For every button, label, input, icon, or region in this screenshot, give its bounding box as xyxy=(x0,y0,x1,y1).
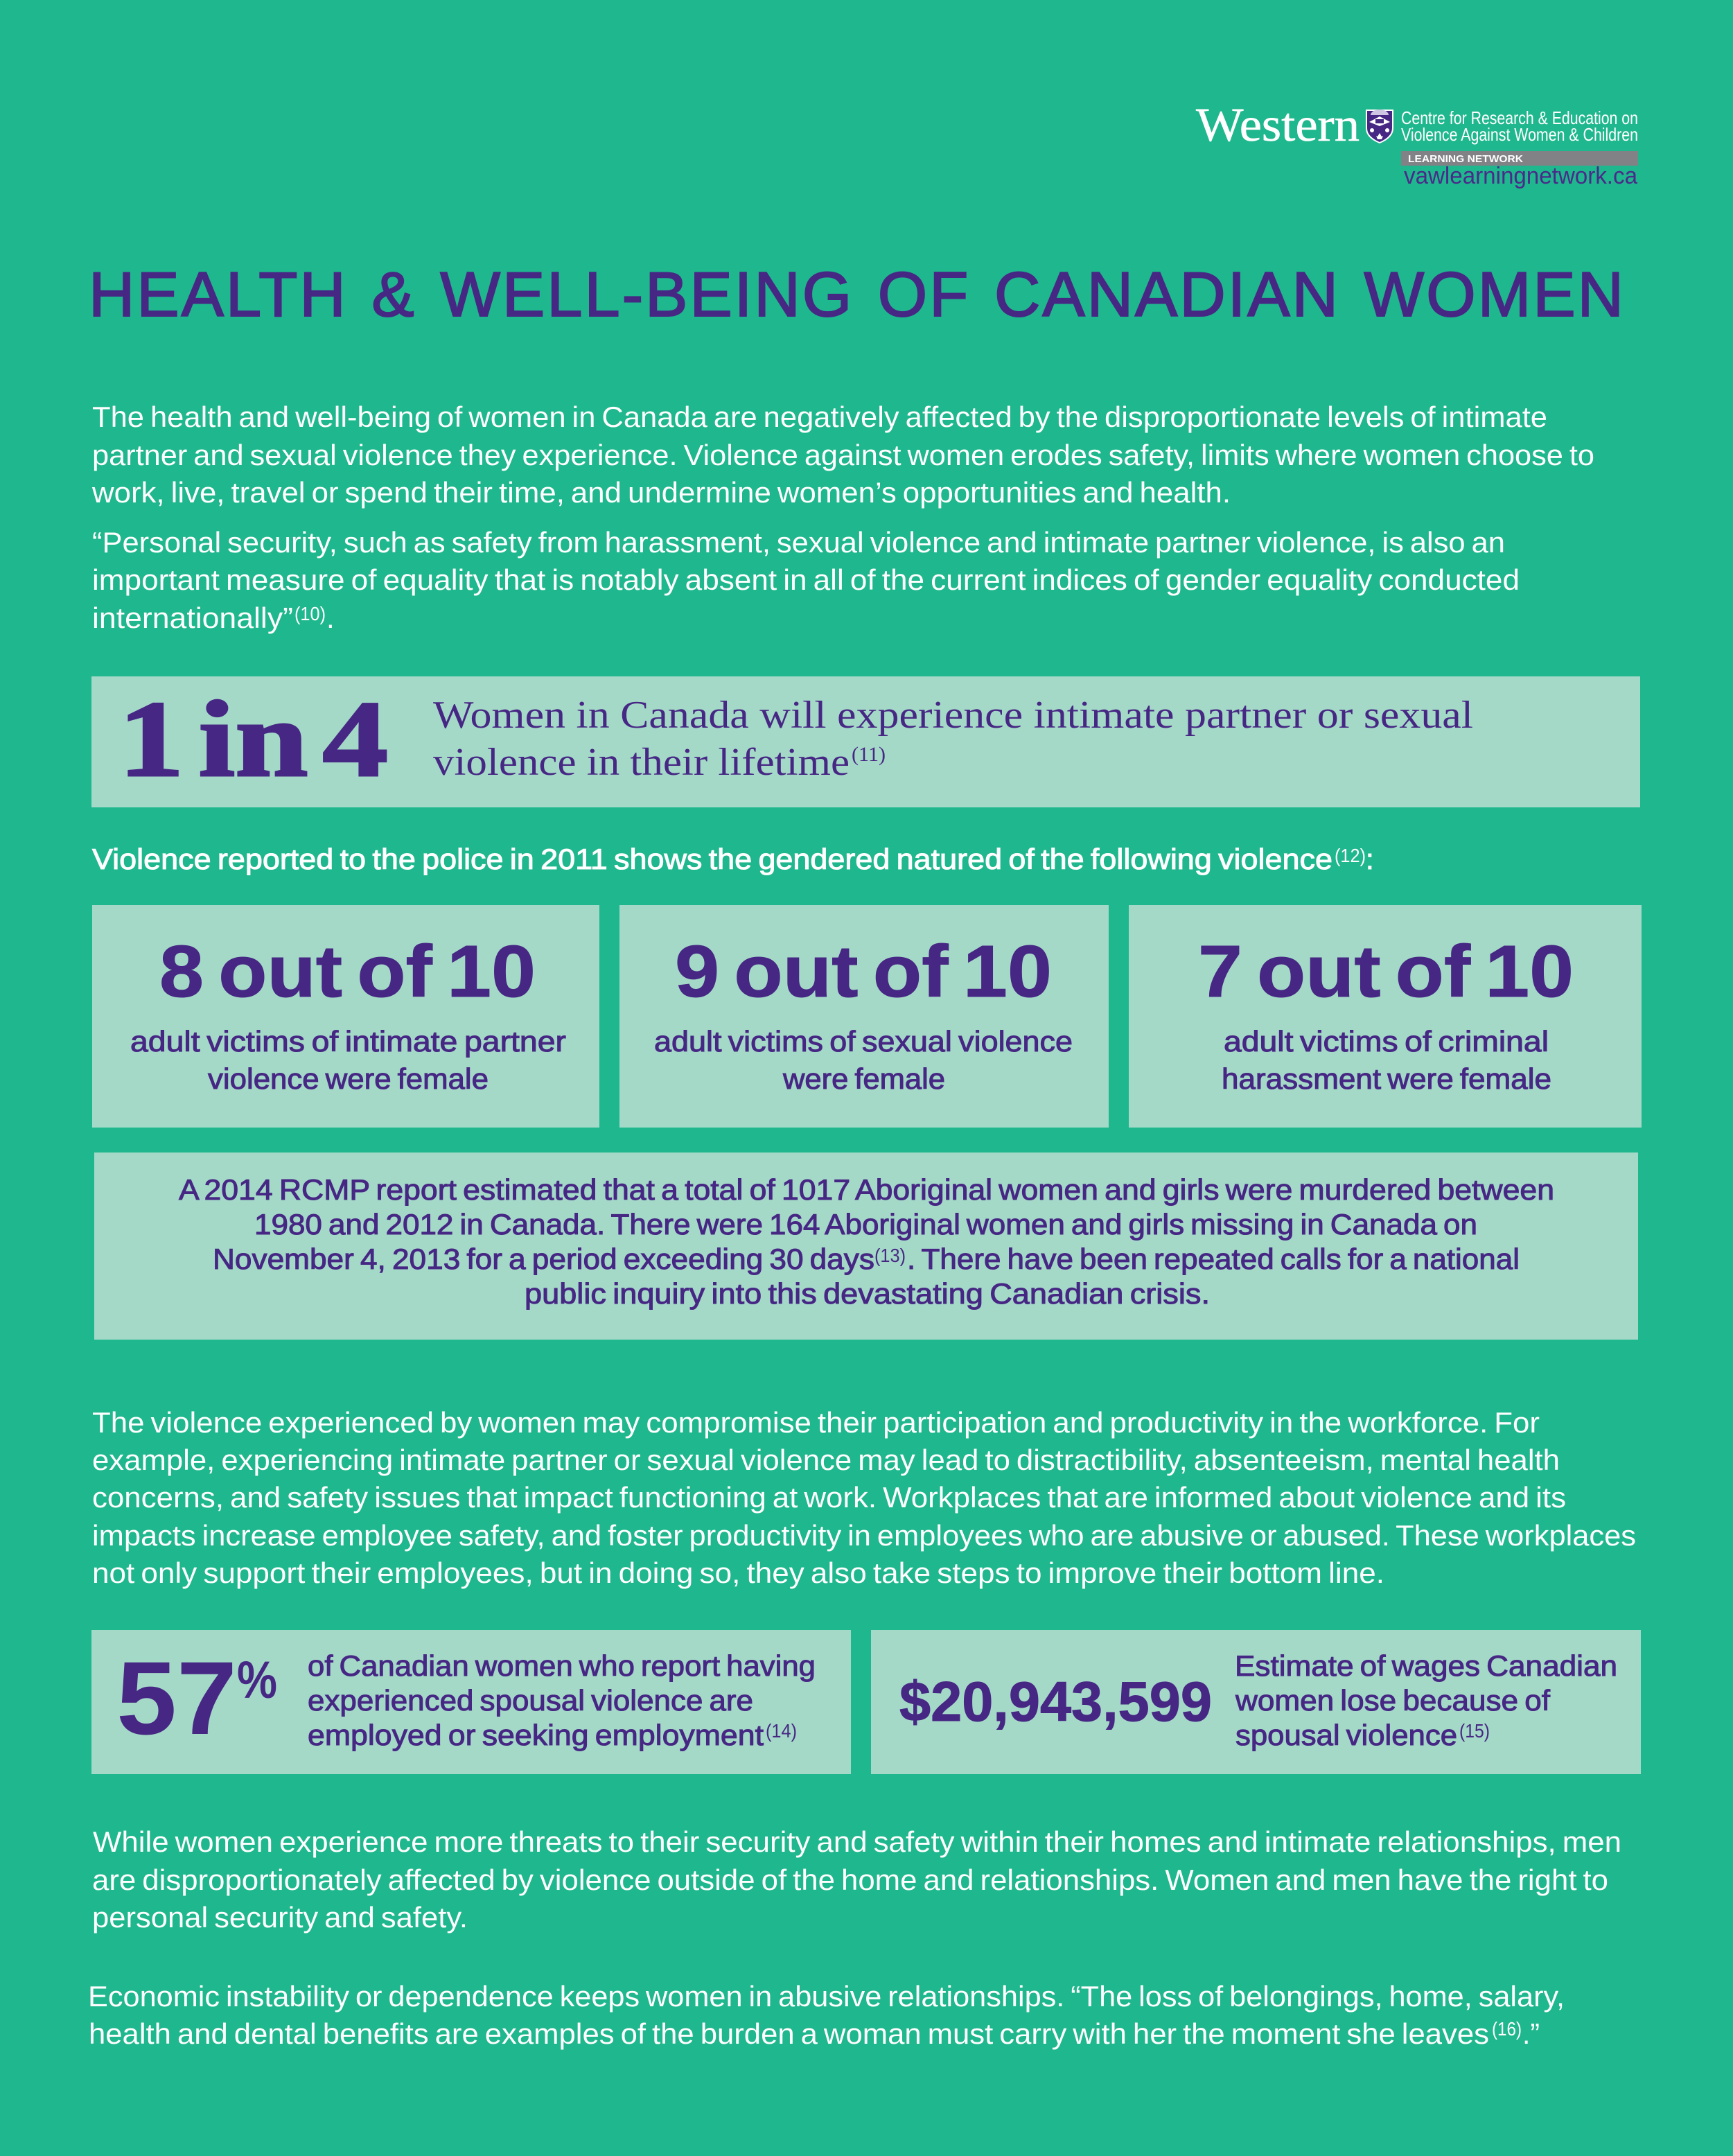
stat description: Estimate of wages Canadian xyxy=(1235,1649,1617,1682)
workplace paragraph: concerns, and safety issues that impact functioning at work. Workplaces that are informed about violence and its xyxy=(92,1481,1566,1514)
panel: 1 in 4 xyxy=(91,676,1640,807)
economic paragraph xyxy=(88,1980,1565,2050)
big stat: 7 out of 10: 7 out of 10 xyxy=(1198,931,1574,1013)
stat description xyxy=(308,1649,816,1751)
icon: Western shield crest xyxy=(1366,109,1393,143)
panel: RCMP report callout: public inquiry into this devastating Canadian crisis. xyxy=(525,1277,1210,1310)
stat description: women lose because of xyxy=(1235,1684,1550,1717)
economic paragraph: health and dental benefits are examples of the burden a woman must carry with her the moment she leaves xyxy=(89,2017,1489,2050)
stat description: harassment were female xyxy=(1222,1062,1551,1095)
panel: 8 out of 10 xyxy=(92,905,599,1128)
stat description: (11) xyxy=(852,743,886,766)
stat description xyxy=(433,694,1473,784)
logo block: Violence Against Women & Children xyxy=(1401,124,1638,145)
stat description: violence in their lifetime xyxy=(433,741,850,784)
intro paragraph: work, live, travel or spend their time, and undermine women’s opportunities and health. xyxy=(91,476,1231,509)
panel: lost wages xyxy=(871,1630,1641,1774)
quote paragraph: internationally” xyxy=(92,602,293,634)
section heading: Violence reported to the police in 2011 shows the gendered natured of the following violence xyxy=(92,843,1332,875)
stat description xyxy=(654,1025,1073,1095)
economic paragraph: Economic instability or dependence keeps women in abusive relationships. “The loss of belongings, home, salary, xyxy=(88,1980,1565,2013)
panel: 9 out of 10 xyxy=(619,905,1109,1128)
quote paragraph xyxy=(92,526,1520,634)
logo block xyxy=(1196,98,1638,189)
title: HEALTH & WELL-BEING OF CANADIAN WOMEN xyxy=(89,260,1626,330)
stat description: (14) xyxy=(766,1720,797,1742)
security paragraph: personal security and safety. xyxy=(92,1901,468,1934)
security paragraph: are disproportionately affected by violence outside of the home and relationships. Women and men have the right to xyxy=(92,1864,1608,1896)
big stat: 57%: % xyxy=(237,1651,277,1710)
big stat: wages figure: $20,943,599 xyxy=(899,1671,1212,1733)
intro paragraph xyxy=(91,401,1594,509)
intro paragraph: The health and well-being of women in Canada are negatively affected by the disproportionate levels of intimate xyxy=(92,401,1547,433)
stat description: spousal violence xyxy=(1235,1719,1457,1751)
big stat: 57%: 57 xyxy=(116,1640,237,1756)
panel: RCMP report callout: November 4, 2013 for a period exceeding 30 days xyxy=(213,1243,874,1275)
learning network bar: LEARNING NETWORK xyxy=(1408,153,1523,165)
stat description: of Canadian women who report having xyxy=(308,1649,816,1682)
stat description xyxy=(1222,1025,1551,1095)
section heading: (12) xyxy=(1335,845,1366,866)
panel: RCMP report callout: . There have been repeated calls for a national xyxy=(907,1243,1520,1275)
centre name: Centre for Research & Education on xyxy=(1401,107,1638,128)
stat description: adult victims of sexual violence xyxy=(654,1025,1073,1058)
panel: RCMP report callout xyxy=(94,1153,1638,1340)
stat description: (15) xyxy=(1459,1720,1490,1742)
big stat: 8 out of 10: 8 out of 10 xyxy=(159,931,536,1013)
quote paragraph: . xyxy=(326,602,335,634)
economic paragraph: (16) xyxy=(1492,2018,1522,2040)
stat description xyxy=(130,1025,566,1095)
panel: RCMP report callout: 1980 and 2012 in Canada. There were 164 Aboriginal women and girls missing in Canada on xyxy=(254,1208,1477,1241)
stat description: adult victims of intimate partner xyxy=(130,1025,566,1058)
security paragraph xyxy=(92,1825,1621,1934)
workplace paragraph xyxy=(92,1406,1636,1589)
quote paragraph: “Personal security, such as safety from harassment, sexual violence and intimate partner violence, is also an xyxy=(92,526,1505,559)
workplace paragraph: The violence experienced by women may compromise their participation and productivity in the workforce. For xyxy=(92,1406,1540,1439)
intro paragraph: partner and sexual violence they experience. Violence against women erodes safety, limits where women choose to xyxy=(92,439,1594,471)
economic paragraph: .” xyxy=(1522,2017,1540,2050)
learning network bar xyxy=(1401,151,1638,166)
stat description: adult victims of criminal xyxy=(1224,1025,1549,1058)
workplace paragraph: not only support their employees, but in doing so, they also take steps to improve their bottom line. xyxy=(92,1557,1384,1589)
panel: 57 percent xyxy=(91,1630,851,1774)
stat description: were female xyxy=(782,1062,945,1095)
stat description: experienced spousal violence are xyxy=(308,1684,753,1717)
workplace paragraph: example, experiencing intimate partner or sexual violence may lead to distractibility, absenteeism, mental health xyxy=(92,1444,1560,1476)
workplace paragraph: impacts increase employee safety, and foster productivity in employees who are abusive or abused. These workplaces xyxy=(92,1519,1636,1552)
stat description: violence were female xyxy=(208,1062,489,1095)
big stat: 1 in 4: 1 in 4 xyxy=(118,678,388,799)
logo: Western wordmark: Western xyxy=(1196,98,1360,151)
website url: vawlearningnetwork.ca xyxy=(1404,163,1637,189)
quote paragraph: (10) xyxy=(294,603,326,624)
stat description: employed or seeking employment xyxy=(308,1719,764,1751)
section heading: : xyxy=(1366,843,1374,875)
stat description: Women in Canada will experience intimate partner or sexual xyxy=(433,694,1473,737)
big stat: 9 out of 10: 9 out of 10 xyxy=(675,931,1052,1013)
security paragraph: While women experience more threats to their security and safety within their homes and intimate relationships, men xyxy=(93,1825,1621,1858)
stat description xyxy=(1235,1649,1617,1751)
quote paragraph: important measure of equality that is notably absent in all of the current indices of gender equality conducted xyxy=(92,563,1520,596)
panel: 7 out of 10 xyxy=(1129,905,1642,1128)
panel: RCMP report callout: (13) xyxy=(874,1245,906,1266)
panel: RCMP report callout: A 2014 RCMP report estimated that a total of 1017 Aboriginal women and girls were murdered between xyxy=(179,1173,1554,1206)
